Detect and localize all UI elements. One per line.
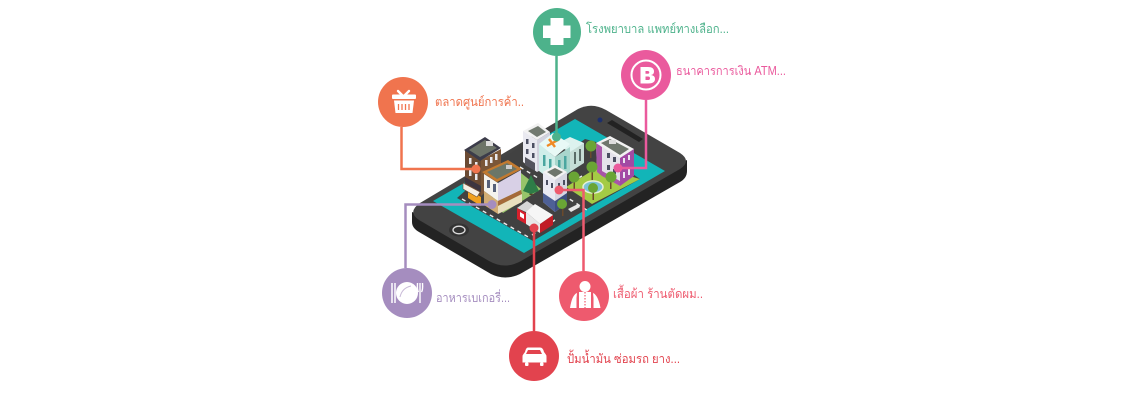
purple building [596,136,634,186]
hospital [539,133,584,183]
icon: car [509,331,559,381]
brown building [463,137,501,206]
road base [457,135,640,241]
connector: purple food [406,200,496,268]
icon: plate and cutlery [382,268,432,318]
screen [433,119,665,253]
city map [457,123,640,241]
home button [449,224,469,236]
label: car service: ปั้มน้ำมัน ซ่อมรถ ยาง... [567,349,680,366]
phone illustration [412,106,687,277]
hospital cross [547,139,558,147]
label: clothes: เสื้อผ้า ร้านตัดผม.. [613,284,703,301]
label: hospital: โรงพยาบาล แพทย์ทางเลือก... [586,21,729,36]
connector: green hospital [552,56,561,142]
speaker [607,120,643,142]
icon: hospital cross [533,8,581,56]
label: bank: ธนาคารการเงิน ATM... [676,64,786,78]
trees [557,140,616,216]
pond [583,181,603,193]
road markings [462,167,590,238]
connector: pink bank [614,100,646,172]
blue building [543,165,567,212]
white building [523,123,550,172]
connector: rose clothes [554,186,584,271]
icon: jacket [559,271,609,321]
orange building [482,160,522,214]
label: market: ตลาดศูนย์การค้า.. [435,95,524,110]
right park [566,167,640,204]
icon: baht coin [621,50,671,100]
fire station [517,201,553,233]
white car [568,204,580,212]
phone top face [413,106,686,265]
camera [598,118,602,122]
icon: shopping basket [378,77,428,127]
connector: red car service [530,224,538,331]
pine tree [523,175,539,195]
label: food: อาหารเบเกอรี่... [436,289,510,305]
connector: orange market [402,127,480,174]
phone side [412,160,687,278]
shop front [468,189,481,206]
left lawn [490,173,541,213]
